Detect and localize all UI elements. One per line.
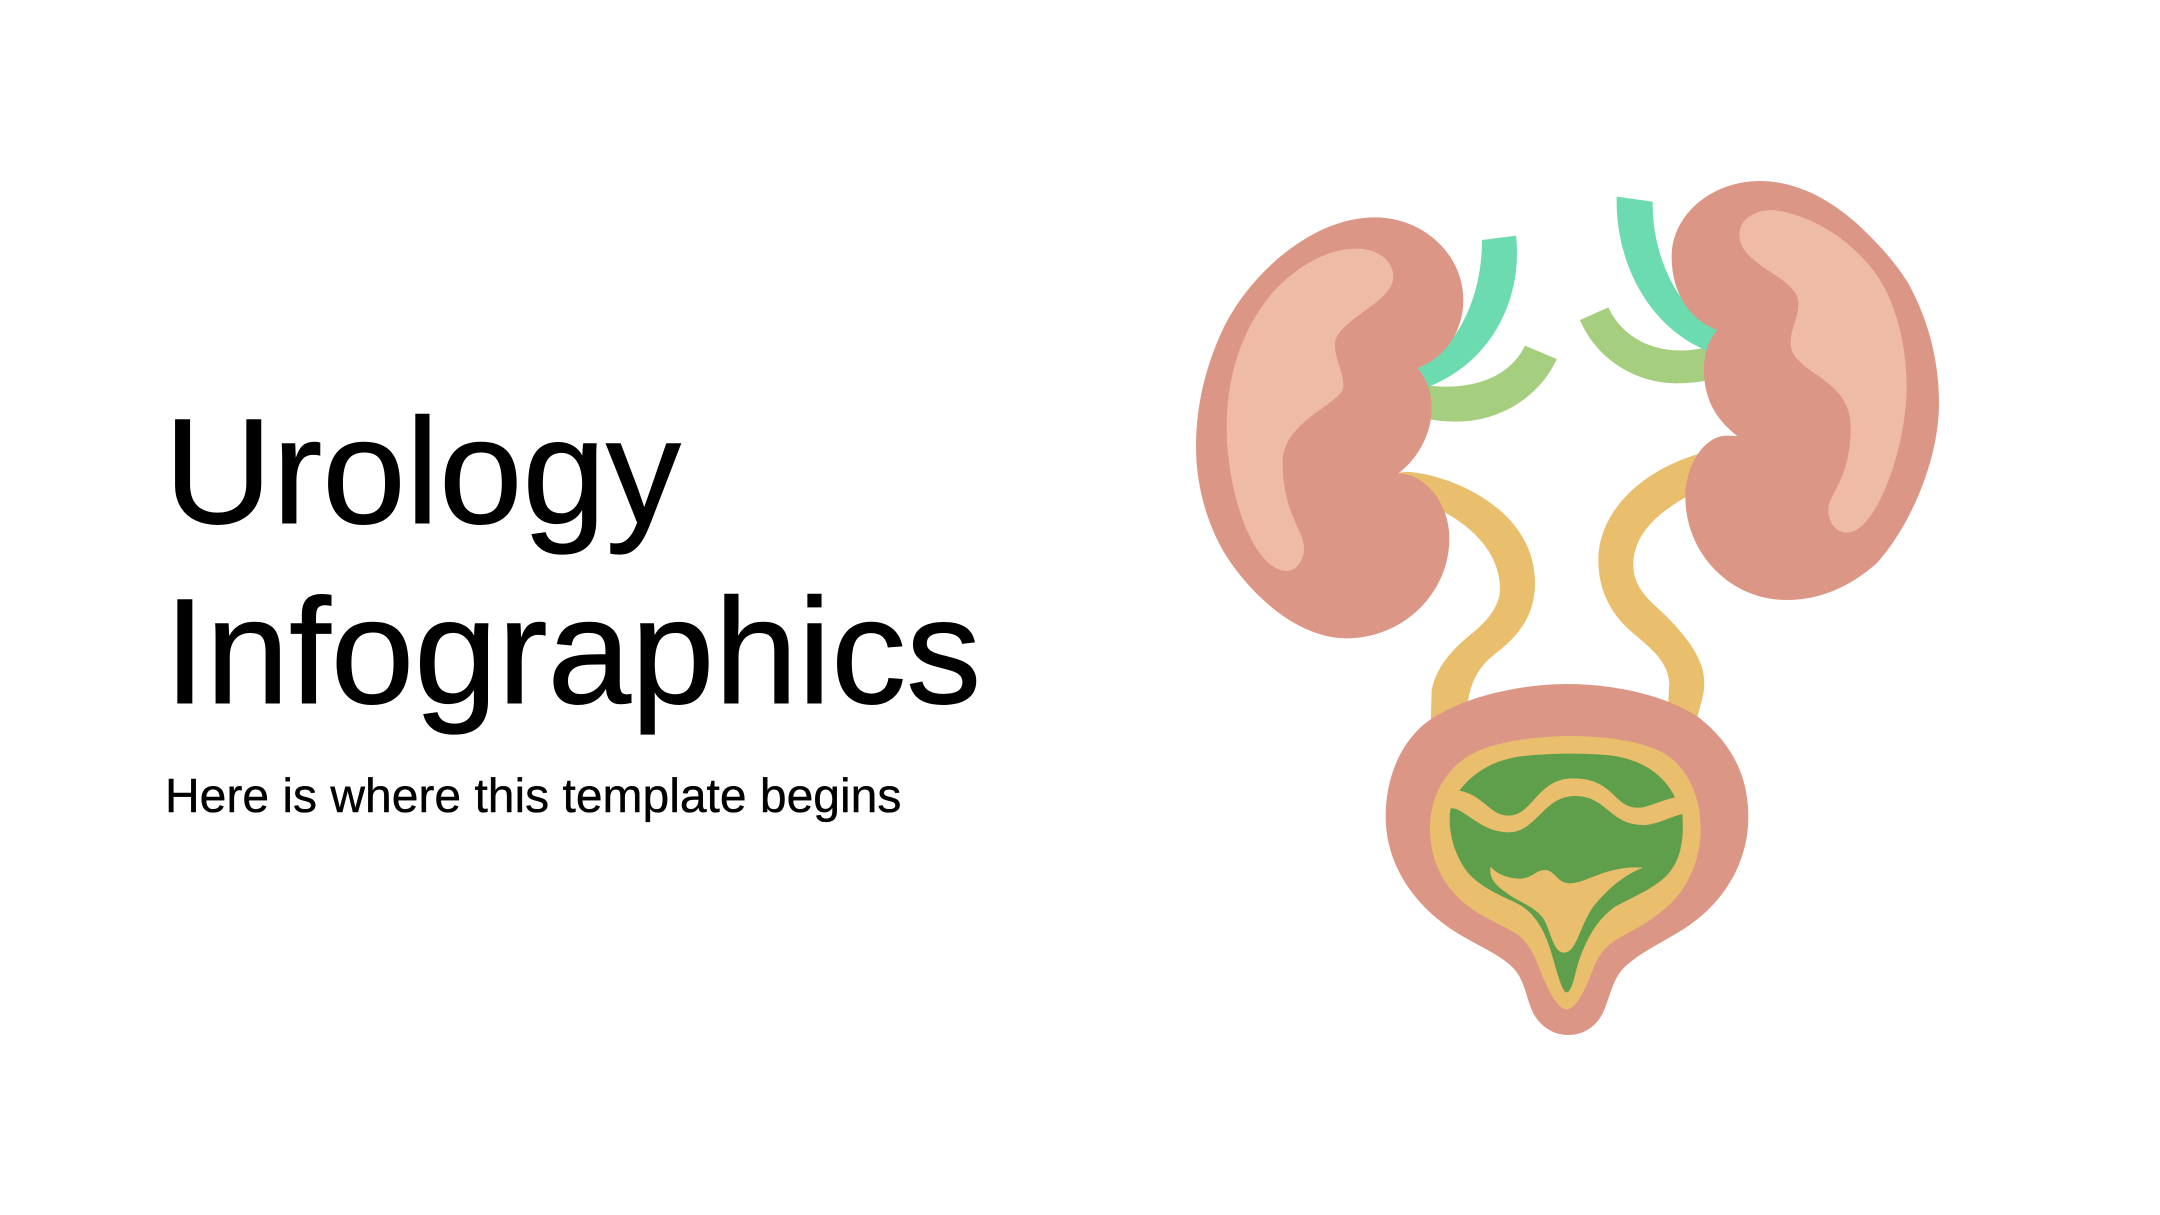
title: Urology [164, 387, 681, 555]
right kidney with vessels and ureter [1580, 181, 1939, 720]
bladder inner lining [1430, 736, 1701, 1009]
right kidney body [1672, 181, 1939, 600]
title: Infographics [164, 567, 981, 735]
left artery: teal [1410, 236, 1517, 387]
right ureter [1598, 450, 1713, 720]
left vein: green [1413, 346, 1557, 422]
subtitle: Here is where this template begins [165, 770, 901, 823]
bladder [1386, 684, 1748, 1035]
title [164, 387, 981, 735]
illustration: urinary system [1196, 181, 1939, 1035]
urine upper region [1459, 754, 1675, 816]
left kidney cortex [1227, 249, 1393, 571]
left kidney body [1196, 217, 1463, 638]
right vein: green [1580, 307, 1720, 383]
left ureter [1398, 472, 1535, 727]
urine lower region [1450, 796, 1683, 992]
right kidney cortex [1739, 210, 1907, 533]
bladder outer wall [1386, 684, 1748, 1035]
right artery: teal [1617, 197, 1717, 353]
left kidney with vessels and ureter [1196, 217, 1557, 727]
trigone [1490, 867, 1643, 953]
